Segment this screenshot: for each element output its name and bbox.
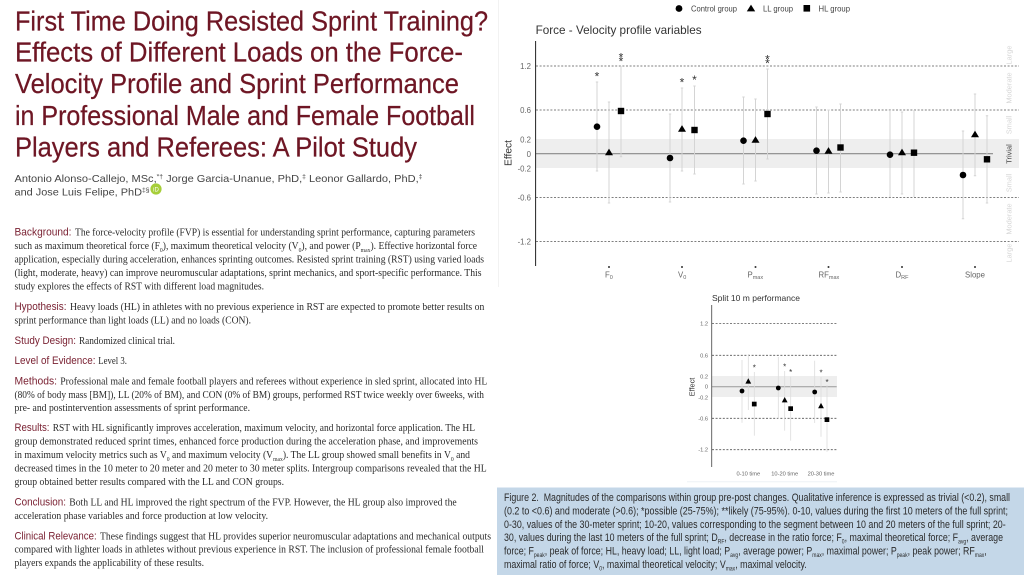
text block: background: application, especially during acceleration, enhances sprinting outcomes. Resisted sprint training (RST) using varied loads [14,254,484,266]
authors: *† [157,174,163,180]
caption text: , maximal theoretical velocity; V [602,559,727,571]
y axis tick labels [698,322,708,454]
magnitude labels: Large [1004,244,1014,262]
y axis tick labels: 0.2 [700,374,708,380]
text block: level of evidence: Level of Evidence: [14,355,96,367]
text block: results: group obtained better results compared with the LL and CON groups. [14,476,284,488]
x axis labels: D [896,270,901,280]
text block: results [14,422,487,488]
y axis tick labels: -0.6 [518,194,531,202]
text block: background: ), maximum theoretical velocity (V [163,240,299,252]
magnitude labels: Large [1004,46,1014,64]
data markers: LL group [605,125,979,155]
significance stars: * [825,378,829,387]
text block: conclusion: Conclusion: [14,497,66,509]
y axis tick labels: 1.2 [700,322,708,328]
legend: Control group [691,4,737,14]
data markers: control group [594,123,966,178]
data markers: HL group [618,108,990,162]
text block: clinical relevance: Clinical Relevance: [14,530,97,542]
significance stars [595,51,770,90]
y axis tick labels: -0.2 [698,395,708,401]
text block: background [14,227,484,293]
caption text: , maximal theoretical force; F [845,532,959,544]
text block: methods: Methods: [14,375,57,387]
legend [676,4,850,14]
caption text: maximal ratio of force; V [504,559,618,571]
caption text: , peak power; RF [908,546,975,558]
text block: results: and [454,449,470,461]
caption text: peak [897,553,908,559]
title: Velocity Profile and Sprint Performance [15,68,459,99]
x axis labels: 20-30 time [808,472,834,478]
caption text: , maximal power; P [822,546,897,558]
y axis title: Effect [504,140,514,166]
x axis labels: RF [901,275,909,281]
caption text: , average [966,532,1003,544]
x axis labels: F [605,270,610,280]
caption text: 0 [599,566,603,572]
title [15,6,488,163]
y axis tick labels: 0 [705,385,708,391]
text block: clinical relevance: compared with lighter loads in athletes without previous experience in RST. The inclusion of professional female football [14,544,484,556]
title: Players and Referees: A Pilot Study [15,132,417,163]
caption text: , peak of force; HL, heavy load; LL, light load; P [545,546,730,558]
authors: Antonio Alonso-Callejo, MSc, [14,173,150,185]
text block: background: ). Effective horizontal force [370,240,477,252]
magnitude labels: Moderate [1004,203,1014,235]
y axis tick labels: 1.2 [520,62,531,71]
caption text: peak [534,553,546,559]
chart: force-velocity profile variables [504,24,1019,281]
x axis labels: 0-10 time [736,472,760,478]
significance stars [753,362,829,387]
caption text [504,492,1010,572]
text block: hypothesis: Hypothesis: [14,301,66,313]
trivial effect band [712,376,837,397]
text block: results: and maximum velocity (V [170,449,273,461]
caption text: 0 [842,540,845,546]
text block: background: ), and power (P [301,240,361,252]
magnitude labels: Small [1004,173,1014,192]
y axis tick labels: 0.2 [520,136,531,144]
icon: ORCID badge [150,183,162,195]
y axis tick labels: -1.2 [518,238,531,246]
authors [14,173,423,199]
text block: background: study explores the effects of RST with different load magnitudes. [14,281,264,293]
text block: results: max [273,456,283,463]
data markers [740,378,829,422]
text block: results: decreased times in the 10 meter to 20 meter and 20 meter to 30 meter splits. Intergroup comparisons revealed that the HL [14,463,487,475]
caption text: , [984,546,987,558]
text block: level of evidence: Level 3. [98,355,127,367]
text block: methods: (80% of body mass [BM]), LL (20% of BM), and CON (0% of BM) groups, performed RST twice weekly over 6weeks, with [14,389,484,401]
caption text: RF [718,540,725,546]
text block: methods: Professional male and female football players and referees without experience in sled sprint, allocated into HL [60,375,488,387]
caption text: max [726,566,735,572]
icon: ORCID badge: iD [153,187,159,193]
y axis tick labels: -0.6 [698,416,708,422]
magnitude labels: Small [1004,115,1014,134]
text block: clinical relevance: These findings suggest that HL provides superior neuromuscular adaptations and mechanical outputs [100,530,491,542]
text block: results: Results: [14,422,50,434]
text block: conclusion: Both LL and HL improved the right spectrum of the FVP. However, the HL group also improved the [69,497,457,509]
authors: ‡ [419,174,423,180]
y axis tick labels: -1.2 [698,448,708,454]
magnitude labels: Trivial [1004,144,1014,164]
text block: results: 0 [167,456,170,463]
title: First Time Doing Resisted Sprint Training? [15,6,488,37]
caption text: , maximal velocity. [735,559,807,571]
significance stars: * [765,53,770,67]
legend: LL group [763,4,793,14]
significance stars: * [819,368,823,377]
title: in Professional Male and Female Football [15,100,475,131]
authors: Leonor Gallardo, PhD, [306,173,419,185]
text block: background: 0 [299,247,301,254]
x axis labels: 10-20 time [771,472,798,478]
significance stars: * [789,368,792,377]
reference lines [712,305,837,467]
x axis labels [736,472,834,478]
text block: results: RST with HL significantly improves acceleration, maximum velocity, and horizontal force application. The HL [53,422,475,434]
x axis labels: 0 [683,275,686,281]
caption text: 30, values during the last 10 meters of the full sprint; D [504,532,760,544]
text block: results: in maximum velocity metrics such as V [14,449,189,461]
y axis tick labels [518,62,532,246]
trivial effect band [536,139,1019,168]
x axis labels: max [829,275,840,281]
text block: background: 0 [160,247,163,254]
x axis labels: 0 [610,275,613,281]
text block: results: group demonstrated reduced sprint times, enhanced force production during the acceleration phase, and improvements [14,436,478,448]
text block: study design: Study Design: [14,335,76,347]
text block: conclusion [14,497,457,522]
significance stars: * [619,51,624,65]
caption text: force; F [504,546,540,558]
chart title: Split 10 m performance [712,294,800,303]
text block: hypothesis: Heavy loads (HL) in athletes with no previous experience in RST are expected to promote better results on [70,301,485,313]
text block: clinical relevance: players expands the applicability of these results. [14,557,204,569]
reference lines [536,41,1019,266]
caption text: avg [730,553,738,559]
text block: background: Background: [14,227,72,239]
text block: hypothesis [14,301,485,327]
caption text: max [975,553,984,559]
text block: study design [14,335,175,347]
legend: HL group [818,4,850,14]
significance stars: * [619,55,624,69]
significance stars: * [692,73,697,87]
error bars [742,354,827,452]
x axis labels [605,266,985,281]
magnitude labels: Moderate [1004,72,1014,104]
caption panel [497,488,1024,575]
x axis labels: RF [818,270,829,280]
authors: ‡ [302,174,306,180]
authors: and Jose Luis Felipe, PhD [14,187,137,199]
x axis labels: P [748,270,753,280]
text block: results: 0 [451,456,454,463]
text block: background: The force-velocity profile (FVP) is essential for understanding sprint performance, capturing parameters [75,227,475,239]
error bars [596,66,988,219]
caption text: max [812,553,822,559]
text block: conclusion: acceleration phase variables and force production at low velocity. [14,510,268,522]
text block: hypothesis: sprint performance than light loads (LL) and no loads (CON). [14,315,251,327]
authors: Jorge Garcia-Unanue, PhD, [163,173,302,185]
text block: background: (light, moderate, heavy) can improve neuromuscular adaptations, sprint mechanics, and sport-specific performance. This [14,267,482,279]
x axis labels: Slope [965,270,985,280]
text block: background: max [361,247,371,254]
text block: results: ). The LL group showed small benefits in V [283,449,451,461]
text block: methods: pre- and postintervention assessments of sprint performance. [14,402,250,414]
text block: background: such as maximum theoretical force (F [14,240,181,252]
y axis tick labels: 0.6 [520,106,531,115]
text block: clinical relevance [14,530,491,569]
significance stars: * [783,362,786,371]
text block: study design: Randomized clinical trial. [79,335,175,347]
caption text: avg [958,540,966,546]
y axis tick labels: -0.2 [518,164,531,174]
y axis title: Effect [687,378,696,396]
y axis tick labels: 0 [527,150,532,159]
text block: methods [14,375,488,414]
title: Effects of Different Loads on the Force- [15,37,463,68]
magnitude labels [1004,46,1014,262]
significance stars: * [595,70,600,84]
caption text: , average power; P [738,546,812,558]
significance stars: * [765,57,770,71]
y axis tick labels: 0.6 [700,353,708,359]
significance stars: * [680,76,685,90]
x axis labels: max [753,275,763,281]
caption text: , decrease in the ratio force; F [724,532,842,544]
chart: split 10 m performance [687,294,837,478]
authors: ‡§ [142,187,150,194]
significance stars: * [753,363,756,372]
chart title: Force - Velocity profile variables [536,24,702,37]
x axis labels: V [678,270,683,280]
